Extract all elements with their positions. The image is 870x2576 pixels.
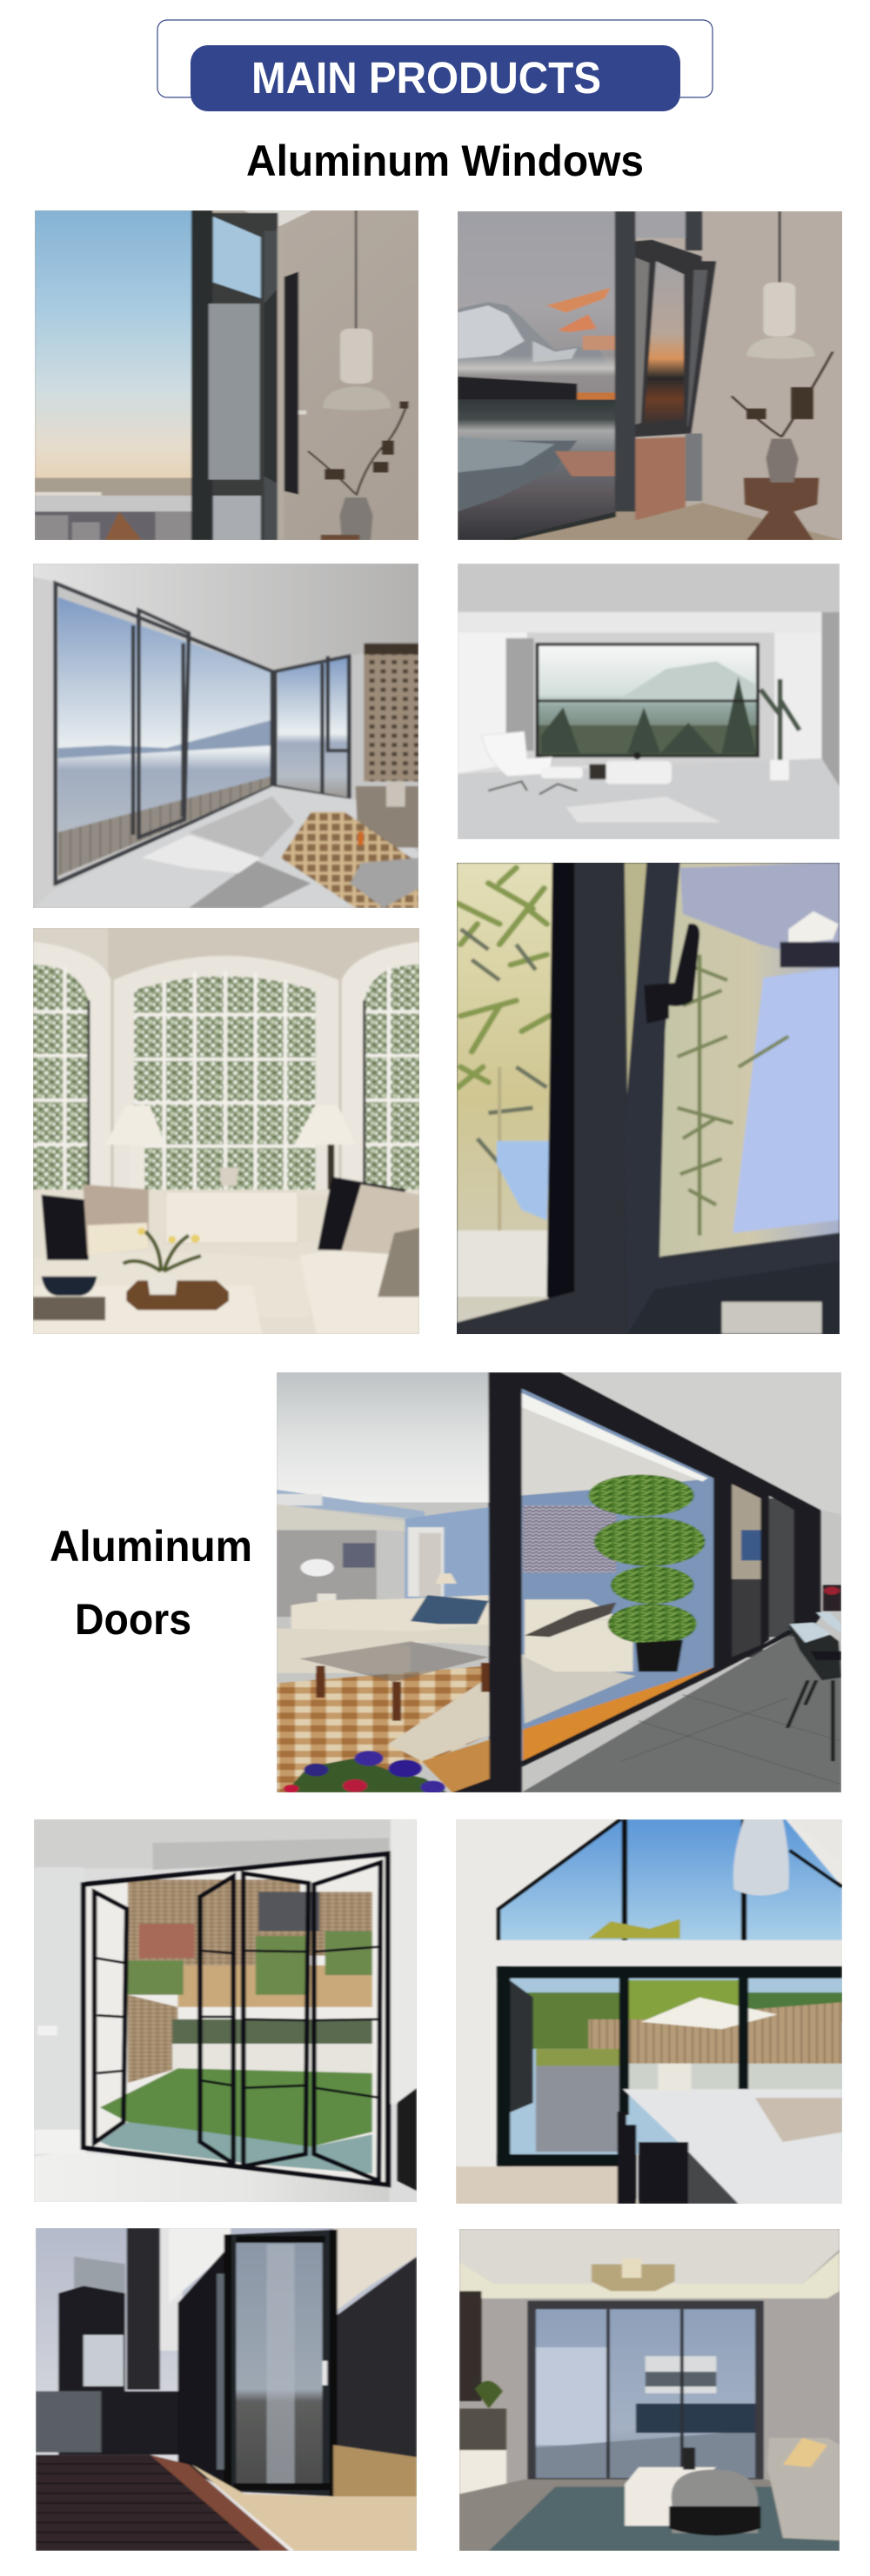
photo 3: corner sliding windows with lake view — [33, 564, 418, 908]
photo 8: folding door opening to garden — [34, 1819, 417, 2202]
glass coffee table — [299, 1641, 488, 1721]
heading: aluminum doors line 2: Doors — [75, 1595, 191, 1644]
low table — [625, 2447, 716, 2526]
photo 2: tilt window with mountain lake view — [458, 211, 842, 540]
stool and vase — [732, 351, 833, 540]
banner outline frame — [157, 20, 713, 97]
pendant lamp — [323, 210, 391, 410]
sofa — [33, 1177, 419, 1334]
purple flowers — [284, 1751, 446, 1793]
folding door frames — [84, 1853, 388, 2185]
terrace chair and table — [787, 1585, 841, 1761]
door frames — [488, 1372, 820, 1792]
photo 10: bifold door on dark terrace — [36, 2228, 417, 2551]
sliding door — [527, 2301, 764, 2482]
door frame — [497, 1966, 842, 2166]
photo 6: close-up of dark window frame and handle with bamboo reflection — [457, 863, 840, 1334]
photo 11: living room with triple glass sliding door — [459, 2229, 840, 2551]
chandelier — [592, 2259, 675, 2291]
pendant shade — [733, 1819, 789, 1896]
ceiling over terrace — [560, 1372, 841, 1514]
photo 4: panoramic window in white living room — [458, 564, 840, 839]
ottoman with tray and flowers — [33, 1228, 262, 1334]
pendant lamp — [746, 211, 815, 359]
banner title: MAIN PRODUCTS — [251, 53, 601, 103]
sofa — [356, 786, 418, 848]
window handle — [644, 924, 699, 1024]
inner room through glass — [522, 1389, 713, 1761]
lounge chair — [481, 731, 583, 794]
photo 5: arched white windows with cream sofa — [33, 928, 419, 1334]
kitchen island — [618, 2064, 842, 2204]
heading: aluminum doors line 1: Aluminum — [50, 1522, 252, 1571]
further door panels — [731, 1484, 797, 1658]
coffee table — [589, 752, 672, 784]
banner pill — [191, 45, 680, 111]
photo 9: gable window with sliding door and white counter — [456, 1819, 842, 2204]
table lamps — [105, 1105, 356, 1191]
lattice table — [280, 812, 418, 908]
side sofa — [767, 2438, 840, 2540]
heading: aluminum windows: Aluminum Windows — [246, 137, 644, 185]
armchair — [669, 2470, 760, 2536]
header banner: main products — [157, 20, 713, 111]
vase with branches — [308, 402, 409, 540]
photo 7: sliding door to living room (aluminum doors) — [277, 1372, 841, 1792]
lower door view — [510, 1978, 843, 2154]
patterned rug — [277, 1666, 488, 1792]
tv cabinet with bonsai — [459, 2381, 506, 2494]
potted plant — [760, 679, 800, 780]
photo 1: window with city view and pendant lamp — [35, 210, 418, 540]
